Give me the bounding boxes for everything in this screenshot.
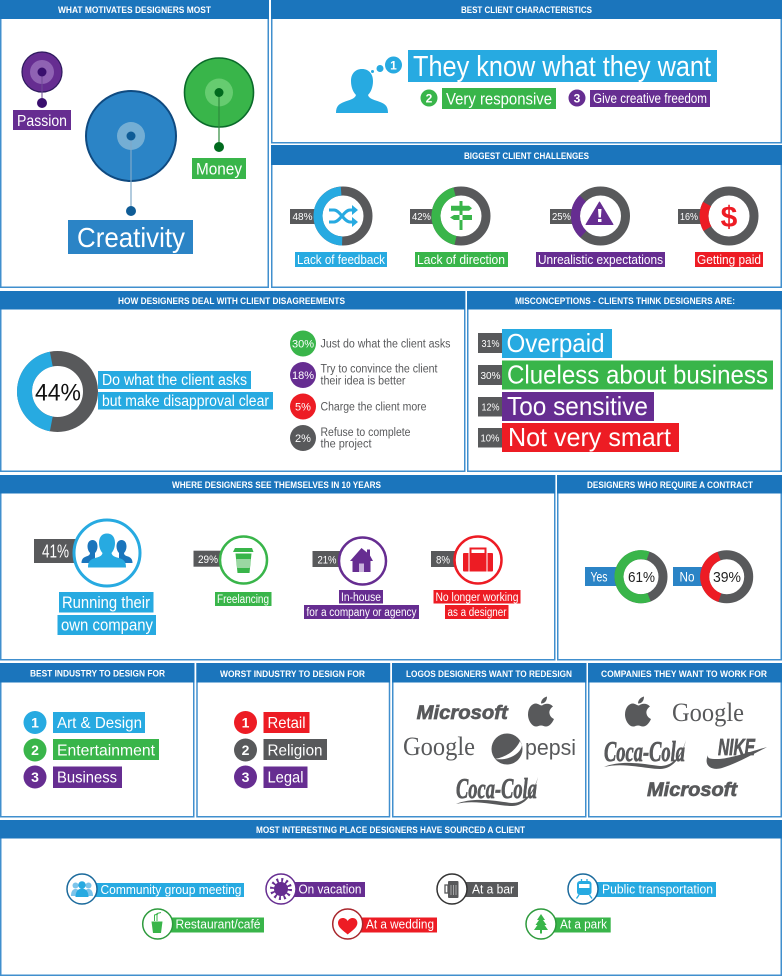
icon: thinking person: 1 <box>390 58 397 72</box>
place: on vacation <box>266 874 365 904</box>
bubble: passion <box>13 52 71 130</box>
panel: worst industry <box>196 663 390 817</box>
logo: apple <box>625 696 651 726</box>
panel: biggest client challenges <box>271 145 782 287</box>
bubble: creativity: Creativity <box>77 222 185 253</box>
logo: google: Google <box>403 732 475 761</box>
rank 2: religion: 2 <box>242 742 250 758</box>
rank 1: art and design: 1 <box>31 714 39 730</box>
label: very responsive <box>420 88 556 109</box>
label: give creative freedom: Give creative freedom <box>593 91 707 106</box>
donut: yes 61 percent: 61% <box>628 569 655 586</box>
item: in-house <box>304 538 419 619</box>
icon: suitcase <box>463 548 493 572</box>
logo: apple <box>528 696 554 726</box>
panel: client disagreements <box>0 291 465 471</box>
item: 18 percent: their idea is better <box>320 376 406 388</box>
place: community group meeting: Community group meeting <box>100 883 242 897</box>
item: freelancing: Freelancing <box>217 594 269 606</box>
item: 30 percent <box>290 330 451 356</box>
place: on vacation: On vacation <box>298 882 362 896</box>
donut: 44 percent: but make disapproval clear <box>102 393 269 410</box>
bubble: creativity <box>68 91 193 254</box>
heading: characteristics: BEST CLIENT CHARACTERISTICS <box>461 5 592 16</box>
place: at a wedding <box>333 909 437 939</box>
label: give creative freedom: 3 <box>574 92 581 106</box>
heading: motivates: WHAT MOTIVATES DESIGNERS MOST <box>58 5 211 16</box>
logo: microsoft: Microsoft <box>417 702 509 724</box>
item: freelancing: 29% <box>198 554 218 566</box>
donut: unrealistic expectations: Unrealistic expectations <box>538 252 663 267</box>
rank 1: art and design: Art & Design <box>57 715 142 732</box>
item: no longer working: 8% <box>436 554 450 566</box>
donut: 44 percent: 44% <box>35 380 81 406</box>
item: 30 percent: 30% <box>292 338 314 350</box>
bar: overpaid: 31% <box>482 339 500 350</box>
bubble: money: Money <box>196 160 242 178</box>
panel: logos to redesign <box>392 663 586 817</box>
item: in-house: for a company or agency <box>306 607 417 619</box>
place: at a park: At a park <box>560 918 608 932</box>
bar: too sensitive: Too sensitive <box>507 391 648 421</box>
donut: getting paid: $ <box>721 201 738 234</box>
label: very responsive: 2 <box>426 92 433 106</box>
bar: clueless about business: 30% <box>480 371 501 382</box>
logo: coca-cola: Coca-Cola <box>456 773 537 805</box>
rank 3: legal <box>234 766 308 788</box>
donut: 44 percent <box>19 353 273 430</box>
item: 2 percent: the project <box>320 438 372 450</box>
logo: coca-cola <box>456 773 538 806</box>
panel: companies to work for <box>588 663 782 817</box>
logo: pepsi: pepsi <box>525 735 576 760</box>
bar: overpaid: Overpaid <box>506 328 604 358</box>
panel: most interesting place <box>0 820 782 975</box>
place: public transportation <box>568 874 716 904</box>
label: give creative freedom <box>568 90 710 107</box>
item: no longer working: No longer working <box>436 592 518 604</box>
item: 18 percent <box>290 362 438 388</box>
rank 1: retail: 1 <box>242 714 250 730</box>
item: in-house: In-house <box>341 592 381 604</box>
place: at a wedding: At a wedding <box>366 918 434 932</box>
heading: disagreements: HOW DESIGNERS DEAL WITH CLIENT DISAGREEMENTS <box>118 296 345 307</box>
donut: yes 61 percent: Yes <box>590 570 608 584</box>
donut: unrealistic expectations <box>536 181 665 267</box>
item: running their own company: 41% <box>42 542 69 562</box>
donut: lack of direction <box>410 186 508 267</box>
icon: house <box>350 548 373 572</box>
panel: designers who require a contract <box>557 475 782 660</box>
heading: ten years: WHERE DESIGNERS SEE THEMSELVES IN 10 YEARS <box>172 480 381 491</box>
rank 3: legal: Legal <box>268 770 304 786</box>
logo: coca-cola <box>604 736 686 769</box>
place: restaurant or cafe <box>143 909 264 939</box>
bubble: passion: Passion <box>17 113 67 130</box>
donut: getting paid: Getting paid <box>697 252 761 267</box>
bar: not very smart: 10% <box>480 434 500 444</box>
donut: unrealistic expectations: 25% <box>552 212 571 223</box>
rank 2: entertainment <box>24 738 159 762</box>
label: very responsive: Very responsive <box>446 90 552 108</box>
donut: lack of feedback: 48% <box>292 212 313 223</box>
panel: misconceptions <box>467 291 782 471</box>
logo: coca-cola: Coca-Cola <box>604 736 685 768</box>
item: 5 percent: 5% <box>295 402 311 414</box>
rank 3: legal: 3 <box>242 769 250 785</box>
donut: lack of feedback <box>290 189 387 267</box>
place: at a bar: At a bar <box>472 882 514 896</box>
rank 3: business <box>24 766 122 788</box>
item: running their own company: Running their <box>62 593 150 612</box>
item: 5 percent: Charge the client more <box>320 402 426 414</box>
heading: companies: COMPANIES THEY WANT TO WORK FOR <box>601 669 767 680</box>
item: 2 percent <box>290 425 410 451</box>
donut: lack of direction: 42% <box>412 212 431 223</box>
rank 1: art and design <box>24 711 145 734</box>
bar: clueless about business: Clueless about business <box>507 360 768 390</box>
heading: misconceptions: MISCONCEPTIONS - CLIENTS THINK DESIGNERS ARE: <box>515 296 735 307</box>
donut: yes 61 percent <box>585 549 669 605</box>
logo: nike <box>707 734 767 769</box>
item: no longer working: as a designer <box>448 607 507 619</box>
item: freelancing <box>194 536 272 606</box>
place: community group meeting <box>67 874 244 904</box>
item: 5 percent <box>290 394 426 420</box>
icon: group of people <box>82 534 132 568</box>
item: 2 percent: 2% <box>295 433 311 445</box>
place: restaurant or cafe: Restaurant/café <box>176 918 261 932</box>
label: they know what they want: They know what they want <box>413 51 711 83</box>
rank 2: religion <box>234 738 327 762</box>
heading: most interesting place: MOST INTERESTING PLACE DESIGNERS HAVE SOURCED A CLIENT <box>256 825 525 836</box>
heading: logos: LOGOS DESIGNERS WANT TO REDESIGN <box>406 669 572 680</box>
rank 2: religion: Religion <box>268 742 322 760</box>
place: at a park <box>526 909 611 939</box>
heading: contract: DESIGNERS WHO REQUIRE A CONTRACT <box>587 480 753 491</box>
donut: 44 percent: Do what the client asks <box>102 372 247 389</box>
donut: no 39 percent: 39% <box>713 569 741 586</box>
donut: no 39 percent: No <box>680 570 694 584</box>
item: in-house: 21% <box>318 554 337 566</box>
rank 3: business: 3 <box>31 769 39 785</box>
donut: getting paid: 16% <box>680 212 698 223</box>
panel: what motivates designers most <box>0 0 269 287</box>
heading: worst industry: WORST INDUSTRY TO DESIGN FOR <box>220 669 365 680</box>
icon: thinking person <box>336 56 402 113</box>
item: running their own company <box>34 520 156 635</box>
donut: no 39 percent <box>673 549 755 605</box>
donut: lack of direction: Lack of direction <box>417 252 505 267</box>
bubble: money <box>184 58 254 179</box>
logo: google: Google <box>672 698 744 727</box>
item: 18 percent: Try to convince the client <box>320 364 438 376</box>
rank 3: business: Business <box>57 770 117 786</box>
rank 1: retail <box>234 711 310 734</box>
rank 1: retail: Retail <box>268 715 306 732</box>
item: 18 percent: 18% <box>292 370 314 382</box>
place: public transportation: Public transportation <box>602 882 713 896</box>
bar: too sensitive: 12% <box>482 402 500 414</box>
panel: best industry <box>0 663 194 817</box>
item: no longer working <box>431 536 520 619</box>
donut: lack of feedback: Lack of feedback <box>297 252 385 267</box>
donut: getting paid <box>678 182 763 267</box>
item: running their own company: own company <box>61 616 153 634</box>
logo: pepsi <box>492 734 576 764</box>
logo: microsoft: Microsoft <box>647 779 739 801</box>
heading: best industry: BEST INDUSTRY TO DESIGN FOR <box>30 668 165 680</box>
item: 30 percent: Just do what the client asks <box>320 338 451 350</box>
rank 2: entertainment: 2 <box>31 742 39 758</box>
panel: best client characteristics <box>271 0 782 143</box>
heading: challenges: BIGGEST CLIENT CHALLENGES <box>464 151 589 162</box>
icon: coffee cup <box>233 548 254 573</box>
logo: nike: NIKE <box>718 734 755 760</box>
bar: not very smart: Not very smart <box>508 422 672 452</box>
place: at a bar <box>437 874 518 904</box>
panel: where designers see themselves <box>0 475 555 660</box>
rank 2: entertainment: Entertainment <box>57 742 156 760</box>
item: 2 percent: Refuse to complete <box>320 427 410 439</box>
